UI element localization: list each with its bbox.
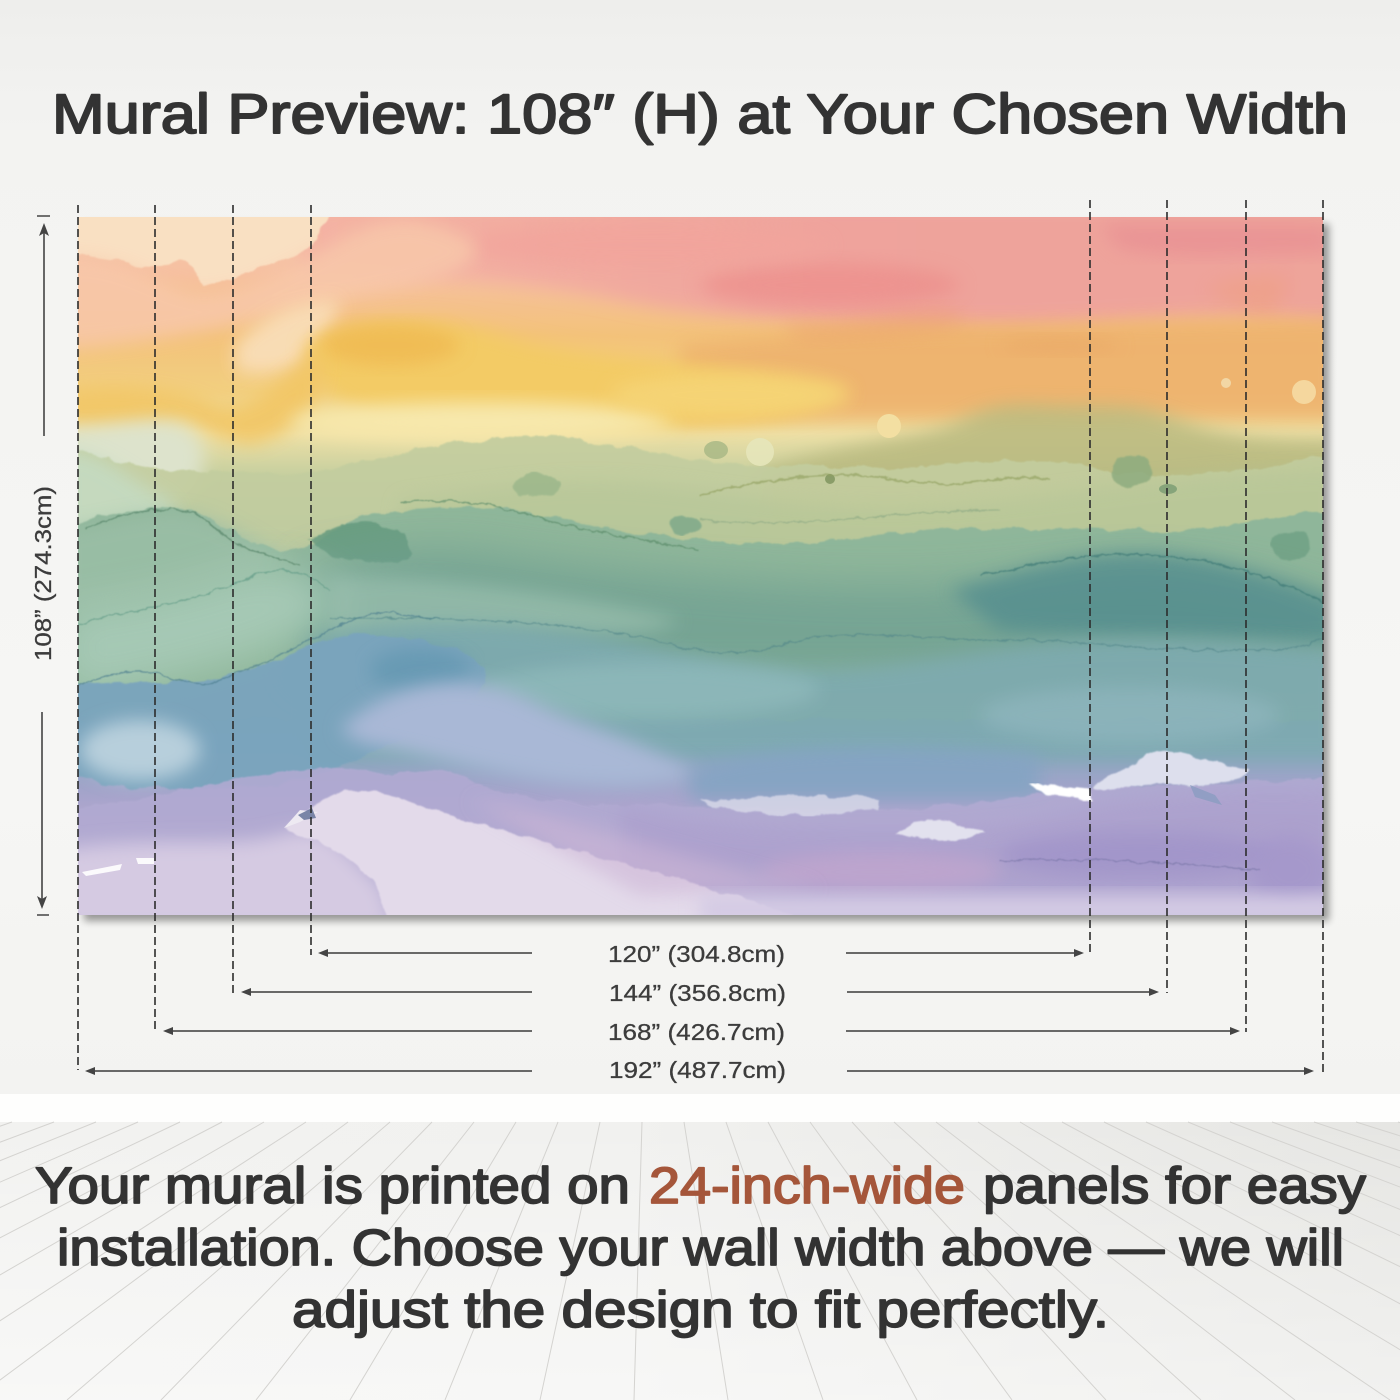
mural shadow: [84, 224, 1329, 921]
lavender blue hump: [340, 683, 700, 787]
yellow wash: [305, 321, 850, 427]
pale green left lower: [60, 567, 340, 692]
dashed width guides: [78, 200, 1323, 1072]
orange yellow left: [60, 345, 322, 445]
width: 168 inch: [163, 1019, 1240, 1045]
teal green band: [300, 550, 1340, 680]
pale cloud: [285, 789, 755, 915]
width: 144 inch: 144” (356.8cm): [609, 980, 786, 1006]
height dimension: [30, 216, 56, 915]
watercolor mural: [60, 200, 1360, 930]
pale green left: [78, 410, 210, 473]
lilac lower left: [78, 828, 386, 915]
white wash patches: [1095, 752, 1250, 793]
bottom description text: panels for easy: [983, 1157, 1367, 1214]
width: 192 inch: [85, 1057, 1314, 1083]
width: 120 inch: 120” (304.8cm): [608, 941, 785, 967]
bottom description text: Your mural is printed on: [35, 1157, 630, 1214]
pale yellow glow: [290, 402, 670, 442]
baseboard: [0, 1094, 1400, 1123]
wood plank floor: [0, 1122, 1400, 1400]
bottom description text: 24-inch-wide: [649, 1157, 965, 1214]
green layer: [78, 505, 1323, 684]
olive hump right: [766, 396, 1323, 477]
peach band left: [60, 221, 475, 350]
salmon sky: [303, 217, 1323, 326]
width: 144 inch: [241, 980, 1159, 1006]
title: Mural Preview: 108″ (H) at Your Chosen Width: [52, 82, 1348, 145]
sage band: [78, 434, 1323, 552]
blue left: [60, 636, 484, 790]
contour lines: [78, 475, 1323, 870]
width: 168 inch: 168” (426.7cm): [608, 1019, 785, 1045]
cream top left: [78, 217, 330, 286]
bottom description text: installation. Choose your wall width above — we will: [57, 1219, 1344, 1276]
width: 192 inch: 192” (487.7cm): [609, 1057, 786, 1083]
height label: 108” (274.3cm): [30, 486, 56, 661]
bottom description text: [35, 1157, 1367, 1338]
orange right: [680, 320, 1340, 420]
width: 120 inch: [318, 941, 1084, 967]
paint blots: [877, 414, 901, 438]
mid teal: [310, 624, 1340, 760]
purple lower band: [78, 766, 1323, 915]
wall background: [0, 0, 1400, 1094]
bottom description text: adjust the design to fit perfectly.: [292, 1281, 1109, 1338]
